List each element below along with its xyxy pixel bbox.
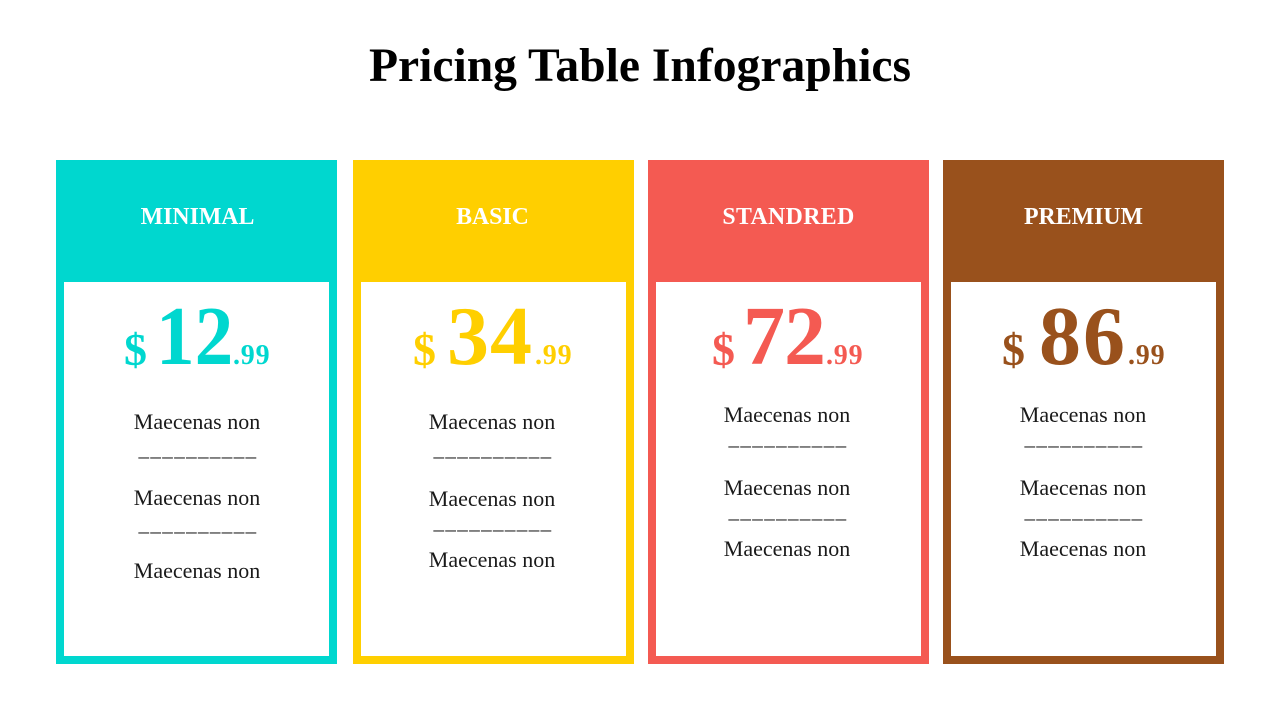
price: basic: $ (413, 324, 436, 375)
price: basic: 34 (447, 290, 533, 383)
feature list: basic: Maecenas non (429, 486, 555, 511)
price: standard: 72 (743, 290, 825, 383)
heading: standard: STANDRED (722, 204, 855, 230)
feature list: basic: Maecenas non (429, 547, 555, 572)
feature list: standard: __________ (728, 426, 848, 450)
feature list: minimal: Maecenas non (134, 485, 260, 510)
price: standard (712, 290, 863, 383)
price: minimal (124, 290, 270, 383)
price: minimal: $ (124, 324, 147, 375)
panel body: standard (656, 282, 921, 656)
heading: basic: BASIC (456, 204, 529, 230)
price: standard: $ (712, 324, 735, 375)
feature list: minimal: Maecenas non (134, 409, 260, 434)
panel: minimal (56, 160, 337, 664)
panel: premium (943, 160, 1224, 664)
feature list: basic: __________ (434, 437, 552, 461)
price: minimal: 12 (156, 290, 233, 383)
panel body: minimal (64, 282, 329, 656)
price: minimal: .99 (233, 340, 270, 371)
title: Pricing Table Infographics (369, 40, 911, 92)
feature list: premium: Maecenas non (1020, 475, 1146, 500)
panel: basic (353, 160, 634, 664)
feature list: premium: Maecenas non (1020, 536, 1146, 561)
price: basic (413, 290, 572, 383)
panel body: basic (361, 282, 626, 656)
feature list: minimal: __________ (138, 512, 258, 536)
feature list: premium: Maecenas non (1020, 402, 1146, 427)
panel: standard (648, 160, 929, 664)
price: premium: $ (1002, 324, 1025, 375)
panel body: premium (951, 282, 1216, 656)
feature list: standard: Maecenas non (724, 475, 850, 500)
price: premium: .99 (1128, 340, 1165, 371)
feature list: premium: __________ (1024, 499, 1144, 523)
feature list: basic (429, 409, 555, 572)
feature list: premium (1020, 402, 1146, 561)
feature list: basic: Maecenas non (429, 409, 555, 434)
price: premium (1002, 290, 1165, 383)
feature list: standard: Maecenas non (724, 536, 850, 561)
feature list: minimal: Maecenas non (134, 558, 260, 583)
feature list: premium: __________ (1024, 426, 1144, 450)
price: premium: 86 (1039, 290, 1127, 383)
feature list: standard: __________ (728, 499, 848, 523)
feature list: minimal (134, 409, 260, 583)
price: basic: .99 (535, 340, 572, 371)
feature list: basic: __________ (434, 510, 552, 534)
feature list: standard: Maecenas non (724, 402, 850, 427)
price: standard: .99 (826, 340, 863, 371)
feature list: minimal: __________ (138, 437, 258, 461)
heading: minimal: MINIMAL (141, 204, 254, 230)
heading: premium: PREMIUM (1024, 204, 1143, 230)
feature list: standard (724, 402, 850, 561)
